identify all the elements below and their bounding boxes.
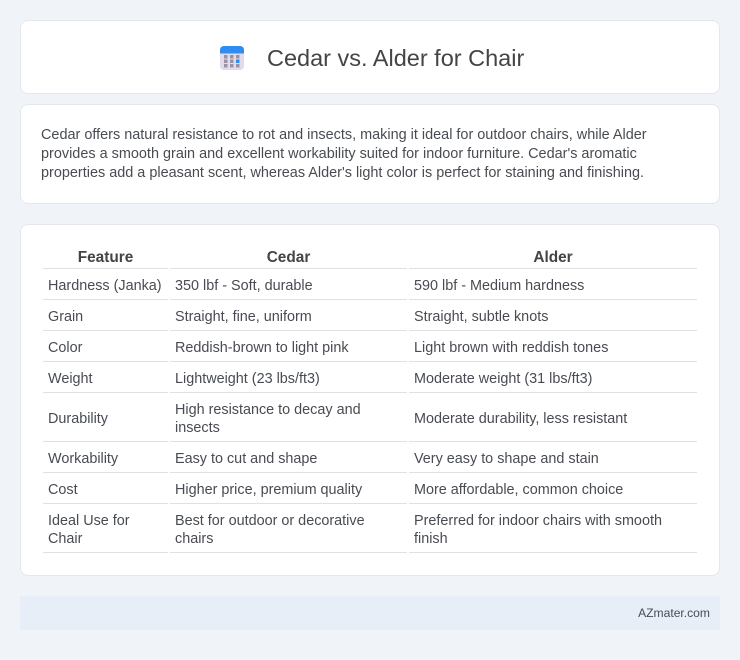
row: cost: Cost bbox=[48, 482, 78, 498]
intro text panel bbox=[20, 104, 720, 204]
hardness cedar: 350 lbf - Soft, durable bbox=[175, 278, 313, 294]
title card bbox=[20, 20, 720, 94]
intro line 1: Cedar offers natural resistance to rot and insects, making it ideal for outdoor chairs, while Alder bbox=[41, 127, 647, 143]
icon: calendar bbox=[220, 46, 244, 70]
row: ideal use bbox=[48, 513, 130, 547]
color cedar: Reddish-brown to light pink bbox=[175, 340, 349, 356]
ideal use alder: Preferred for indoor chairs with smooth bbox=[414, 513, 662, 529]
footer bar bbox=[20, 596, 720, 630]
ideal use cedar: chairs bbox=[175, 531, 213, 547]
durability cedar bbox=[175, 402, 361, 436]
workability cedar: Easy to cut and shape bbox=[175, 451, 317, 467]
grain alder: Straight, subtle knots bbox=[414, 309, 548, 325]
intro line 2: provides a smooth grain and excellent workability suited for indoor furniture. Cedar's aromatic bbox=[41, 146, 637, 162]
hardness alder: 590 lbf - Medium hardness bbox=[414, 278, 584, 294]
comparison table panel bbox=[20, 224, 720, 576]
header: Cedar: Cedar bbox=[267, 249, 310, 266]
row: grain: Grain bbox=[48, 309, 83, 325]
row: ideal use: Ideal Use for bbox=[48, 513, 130, 529]
row: color: Color bbox=[48, 340, 82, 356]
intro line 3: properties add a pleasant scent, whereas Alder's light color is perfect for staining and finishing. bbox=[41, 165, 644, 181]
durability cedar: insects bbox=[175, 420, 220, 436]
ideal use alder: finish bbox=[414, 531, 448, 547]
ideal use cedar: Best for outdoor or decorative bbox=[175, 513, 365, 529]
color alder: Light brown with reddish tones bbox=[414, 340, 608, 356]
durability cedar: High resistance to decay and bbox=[175, 402, 361, 418]
row: workability: Workability bbox=[48, 451, 118, 467]
weight cedar: Lightweight (23 lbs/ft3) bbox=[175, 371, 320, 387]
row: durability: Durability bbox=[48, 411, 108, 427]
ideal use alder bbox=[414, 513, 662, 547]
grain cedar: Straight, fine, uniform bbox=[175, 309, 312, 325]
cost cedar: Higher price, premium quality bbox=[175, 482, 362, 498]
row: hardness: Hardness (Janka) bbox=[48, 278, 162, 294]
weight alder: Moderate weight (31 lbs/ft3) bbox=[414, 371, 592, 387]
header: Feature: Feature bbox=[78, 249, 133, 266]
cost alder: More affordable, common choice bbox=[414, 482, 623, 498]
title: Cedar vs. Alder for Chair bbox=[267, 45, 524, 71]
header: Alder: Alder bbox=[533, 249, 573, 266]
workability alder: Very easy to shape and stain bbox=[414, 451, 599, 467]
ideal use cedar bbox=[175, 513, 365, 547]
row: weight: Weight bbox=[48, 371, 93, 387]
footer credit: AZmater.com bbox=[638, 606, 710, 620]
row: ideal use: Chair bbox=[48, 531, 82, 547]
durability alder: Moderate durability, less resistant bbox=[414, 411, 627, 427]
